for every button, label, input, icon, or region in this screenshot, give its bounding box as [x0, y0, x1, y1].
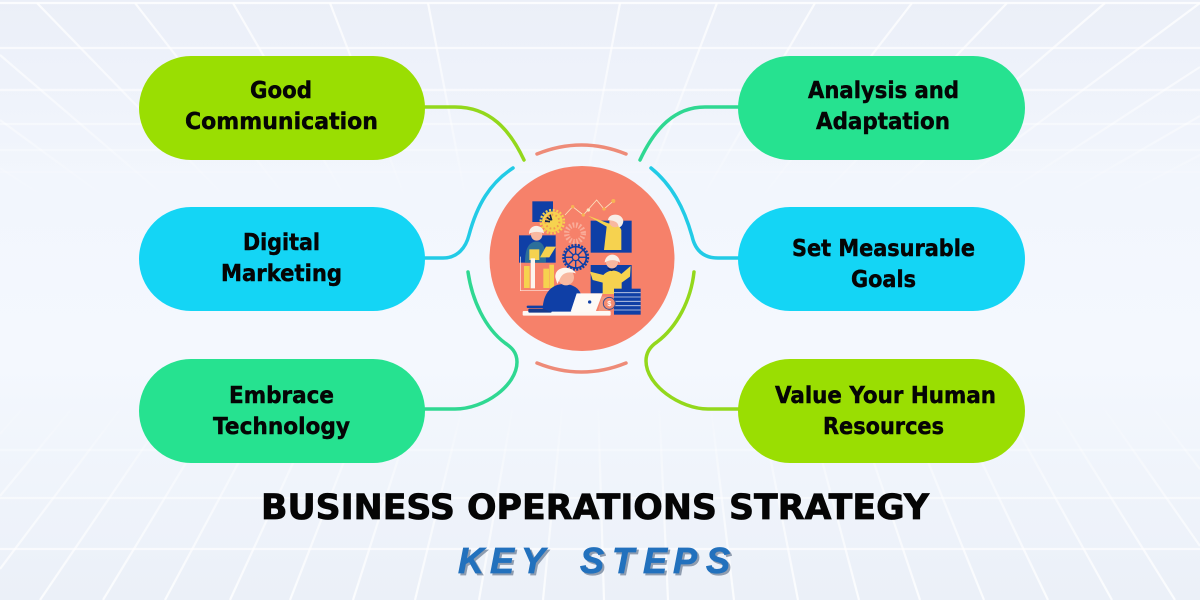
upper right panel with person [588, 215, 632, 253]
pill: good communication [139, 56, 425, 160]
bar chart [520, 257, 555, 291]
connector: set measurable goals [651, 168, 738, 258]
left panel with person [519, 226, 556, 263]
pill: digital marketing: Digital [243, 230, 320, 256]
desk [523, 311, 611, 316]
connector: embrace technology [425, 272, 517, 409]
top arc [537, 145, 626, 154]
network hexagons [567, 225, 583, 242]
pill: value your human resources: Resources [823, 414, 944, 440]
pill: set measurable goals: Set Measurable [792, 236, 975, 262]
pill: set measurable goals [738, 207, 1025, 311]
connector: good communication [425, 107, 524, 160]
pill: good communication: Communication [185, 109, 378, 135]
laptop [571, 293, 603, 312]
blue gear [563, 245, 588, 270]
pill: digital marketing: Marketing [221, 261, 342, 287]
pill: set measurable goals: Goals [851, 267, 916, 293]
pill: embrace technology [139, 359, 425, 463]
connector: analysis and adaptation [640, 107, 738, 160]
pill: analysis and adaptation: Analysis and [808, 78, 959, 104]
subtitle: key steps: KEYSTEPS [460, 542, 732, 583]
coin stack [614, 289, 641, 315]
connector: digital marketing [425, 168, 513, 258]
title: BUSINESS OPERATIONS STRATEGY [261, 488, 930, 528]
illustration: business team [519, 199, 641, 316]
dollar coin: $ [607, 299, 611, 308]
books [527, 306, 552, 313]
lower right panel with person [590, 255, 632, 294]
pill: value your human resources: Value Your Human [775, 383, 996, 409]
pill: digital marketing [139, 207, 425, 311]
pill: analysis and adaptation: Adaptation [816, 109, 950, 135]
seated person [543, 268, 581, 312]
center circle [490, 166, 674, 351]
pill: good communication: Good [250, 78, 312, 104]
pill: embrace technology: Technology [213, 414, 350, 440]
yellow gear [541, 210, 564, 233]
trend line [565, 199, 615, 217]
bottom arc [537, 363, 626, 372]
pill: value your human resources [738, 359, 1025, 463]
blue square behind gear [532, 201, 553, 222]
pill: analysis and adaptation [738, 56, 1025, 160]
subtitle: key steps: KEYSTEPS [458, 540, 730, 581]
connector: value your human resources [646, 272, 738, 409]
pill: embrace technology: Embrace [229, 383, 334, 409]
